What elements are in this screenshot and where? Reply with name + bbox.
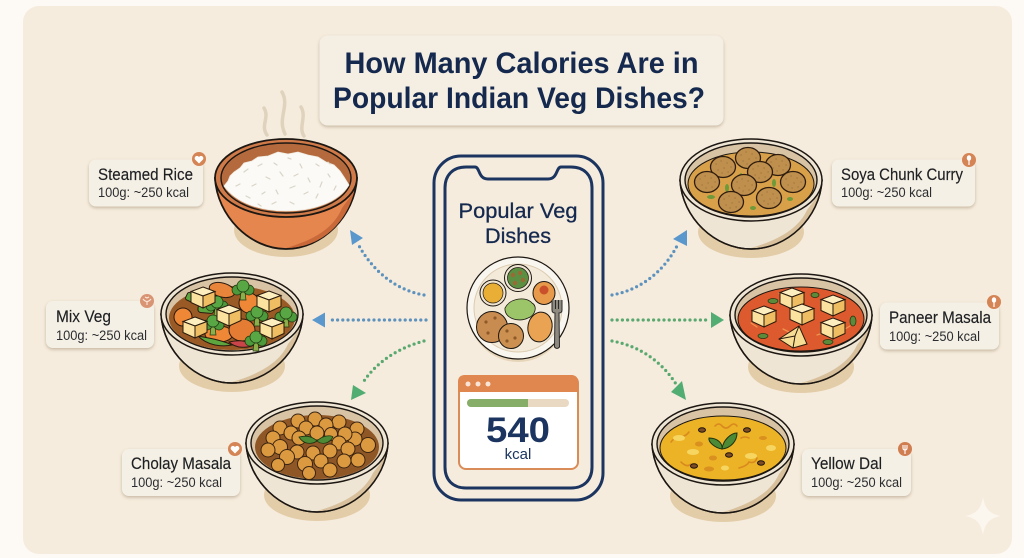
title: How Many Calories Are in — [344, 47, 698, 80]
label: soya chunk curry — [832, 153, 976, 206]
icon: thali plate — [467, 257, 569, 362]
label: yellow dal: Yellow Dal — [811, 455, 882, 473]
calorie card: 540 — [486, 411, 550, 450]
arrow: to mix veg — [312, 312, 426, 328]
label: mix veg: Mix Veg — [56, 308, 111, 326]
phone heading: Popular Veg — [458, 200, 578, 223]
calorie card — [458, 375, 578, 469]
label: paneer masala: Paneer Masala — [889, 309, 992, 327]
bowl: steamed rice — [215, 139, 357, 257]
label: paneer masala: 100g: ~250 kcal — [889, 329, 980, 344]
label: mix veg: 100g: ~250 kcal — [56, 328, 147, 343]
bowl: yellow dal — [652, 403, 794, 522]
label: cholay masala — [122, 442, 242, 496]
label: soya chunk curry: Soya Chunk Curry — [841, 166, 964, 184]
label: soya chunk curry: 100g: ~250 kcal — [841, 185, 932, 200]
label: yellow dal — [802, 442, 912, 496]
label: cholay masala: 100g: ~250 kcal — [131, 475, 222, 490]
phone — [434, 156, 603, 500]
arrow: to cholay masala — [351, 341, 424, 400]
label: cholay masala: Cholay Masala — [131, 455, 232, 473]
label: paneer masala — [880, 295, 1001, 350]
bowl: soya chunk curry — [680, 139, 822, 258]
arrow: to steamed rice — [350, 230, 424, 295]
bowl: cholay masala — [246, 402, 388, 521]
label: steamed rice — [89, 152, 206, 206]
label: mix veg — [46, 294, 154, 348]
icon: sparkle watermark — [965, 497, 1001, 535]
phone: Dishes — [485, 225, 551, 248]
icon: steam — [264, 92, 304, 136]
bowl: paneer masala — [730, 274, 872, 393]
calorie card: kcal — [505, 446, 531, 463]
label: steamed rice: 100g: ~250 kcal — [98, 185, 189, 200]
arrow: to yellow dal — [612, 341, 686, 400]
arrow: to paneer masala — [612, 312, 724, 328]
label: yellow dal: 100g: ~250 kcal — [811, 475, 902, 490]
title: Popular Indian Veg Dishes? — [333, 82, 705, 115]
bowl: mix veg — [161, 273, 303, 392]
label: steamed rice: Steamed Rice — [98, 166, 193, 184]
title — [320, 36, 724, 126]
arrow: to soya chunk curry — [612, 230, 687, 295]
